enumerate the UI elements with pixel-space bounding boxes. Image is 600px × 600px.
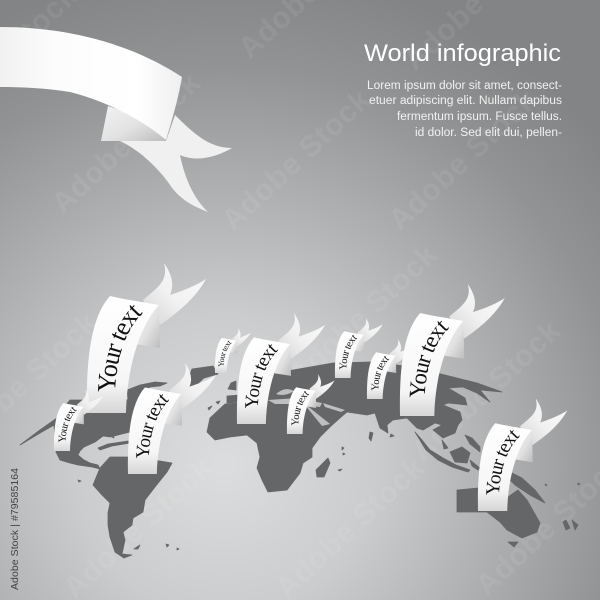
banner body — [0, 27, 182, 140]
ribbon marker: europe: Your text — [245, 344, 278, 408]
continent: South America — [93, 457, 172, 558]
ribbon marker: greenland small — [214, 328, 250, 373]
banner fold — [101, 106, 166, 141]
european islands — [208, 381, 240, 410]
ribbon marker: central asia small — [366, 339, 404, 399]
ribbon marker: australia: Your text — [486, 430, 520, 495]
watermark: Adobe Stock — [382, 83, 544, 237]
text block: id dolor. Sed elit dui, pellen- — [415, 127, 562, 139]
continent: Africa and Eurasia — [207, 362, 502, 492]
banner tails — [120, 115, 232, 212]
ribbon marker: south america — [128, 364, 216, 474]
ribbon marker: russia small: Your text — [339, 334, 358, 370]
indian ocean islands — [338, 432, 394, 471]
ribbon marker: asia large — [400, 284, 505, 416]
ribbon marker: australia — [478, 398, 568, 511]
continent: Greenland — [187, 366, 218, 389]
watermark: Adobe Stock — [45, 66, 207, 220]
arctic islands — [127, 382, 167, 399]
ribbon marker: far left small: Your text — [58, 406, 77, 442]
text block: etuer adipiscing elit. Nullam dapibus — [369, 95, 562, 107]
text block: Lorem ipsum dolor sit amet, consect- — [367, 80, 562, 92]
ribbon marker: middle east small — [286, 374, 334, 434]
continent: South East Asia islands — [415, 432, 480, 472]
watermark: Adobe Stock — [282, 238, 444, 392]
text block: fermentum ipsum. Fusce tellus. — [397, 111, 562, 123]
continent: Australia — [457, 488, 540, 538]
ribbon marker: large left — [87, 263, 206, 413]
ribbon marker: middle east small: Your text — [291, 390, 310, 426]
world map — [20, 362, 580, 558]
continent: New Guinea — [508, 472, 545, 503]
ribbon marker: south america: Your text — [136, 394, 169, 458]
title: World infographic — [364, 40, 561, 67]
ribbon marker: far left small — [54, 390, 102, 451]
cuba and caribbean — [78, 432, 179, 550]
ribbon marker: russia small — [334, 318, 382, 378]
ribbon marker: europe — [236, 313, 325, 424]
watermark: Adobe Stock — [405, 314, 567, 468]
inland seas — [268, 389, 345, 426]
continent: North America — [20, 392, 150, 469]
text block — [367, 80, 562, 139]
banner ribbon — [0, 27, 232, 212]
watermark: Adobe Stock — [215, 83, 377, 237]
tasmania and new zealand — [508, 483, 580, 547]
ribbon marker: central asia small: Your text — [371, 356, 390, 390]
ribbon marker: greenland small: Your text — [218, 340, 232, 367]
continent: Madagascar — [316, 458, 330, 477]
stock id side text: Adobe Stock | #79585164 — [9, 468, 21, 590]
ribbon marker: asia large: Your text — [410, 321, 449, 398]
ribbon marker: large left: Your text — [98, 305, 142, 392]
